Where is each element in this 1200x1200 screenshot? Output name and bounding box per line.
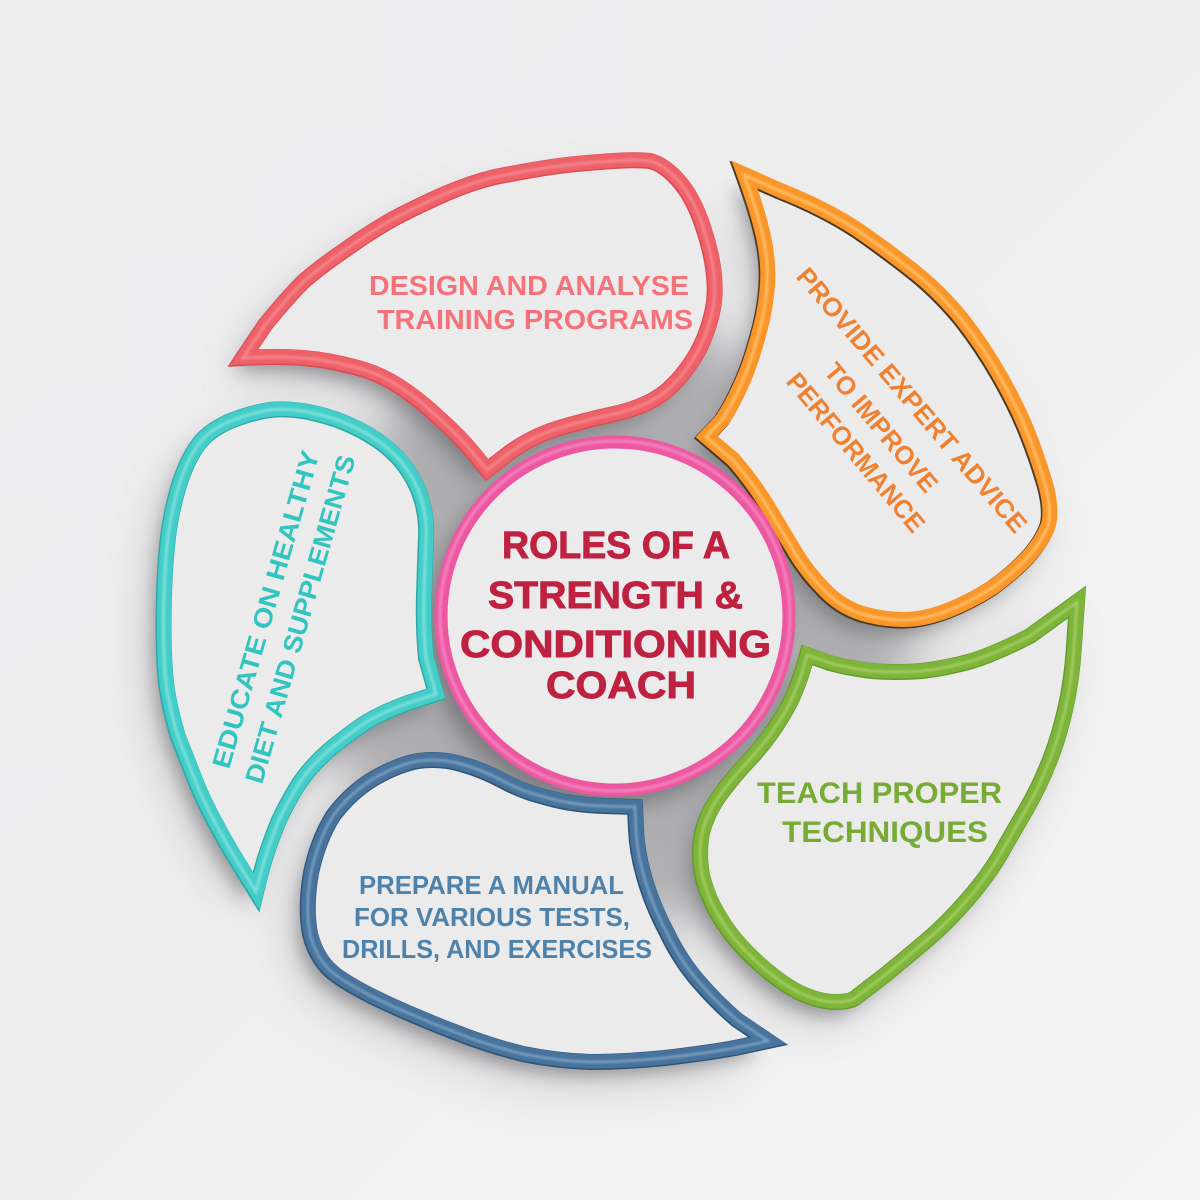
center circle xyxy=(440,441,790,791)
text: techniques: TECHNIQUES xyxy=(782,816,988,849)
text: manual xyxy=(342,870,652,964)
panel: expert advice xyxy=(705,174,1050,621)
wide soft shadows xyxy=(148,182,1061,1084)
title: STRENGTH & xyxy=(488,575,743,617)
text: expert advice: TO IMPROVE xyxy=(818,357,944,498)
text: diet: DIET AND SUPPLEMENTS xyxy=(239,452,361,787)
text: manual: PREPARE A MANUAL xyxy=(359,870,624,900)
text: manual: FOR VARIOUS TESTS, xyxy=(354,902,630,932)
text: diet: EDUCATE ON HEALTHY xyxy=(206,447,325,772)
panel: manual xyxy=(308,760,768,1062)
panel: diet xyxy=(164,409,436,892)
tight shadows xyxy=(154,173,1068,1075)
text: training: TRAINING PROGRAMS xyxy=(377,304,693,335)
text: teach: TEACH PROPER xyxy=(757,777,1002,810)
central shadow xyxy=(310,325,910,925)
panel: design and analyse xyxy=(243,160,715,470)
title: ROLES OF A xyxy=(502,525,730,567)
title xyxy=(460,525,771,707)
text: manual: DRILLS, AND EXERCISES xyxy=(342,934,652,964)
panel: techniques xyxy=(700,602,1078,1002)
text: design: DESIGN AND ANALYSE xyxy=(369,270,689,301)
text: expert advice: PERFORMANCE xyxy=(780,367,931,538)
title: CONDITIONING xyxy=(460,624,771,666)
text: expert advice: PROVIDE EXPERT ADVICE xyxy=(790,261,1033,539)
title: COACH xyxy=(546,665,696,707)
